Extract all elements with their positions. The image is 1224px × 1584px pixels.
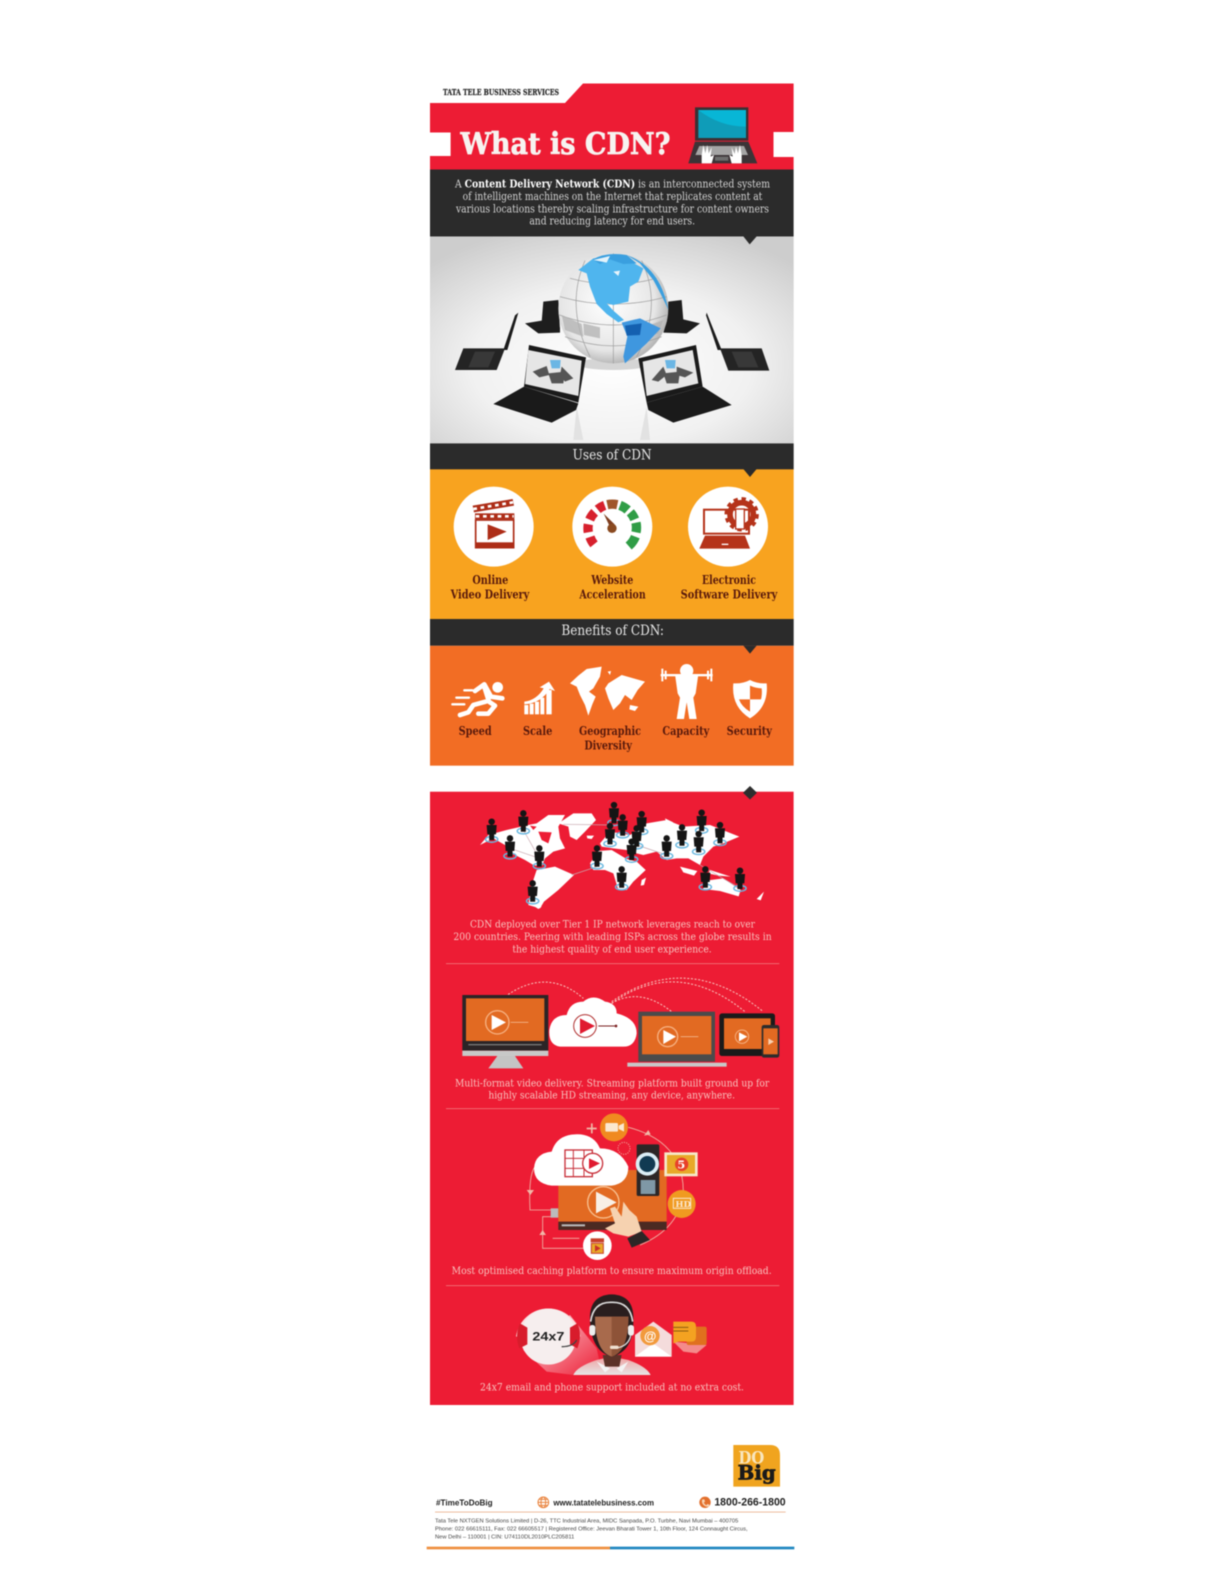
colour bar	[427, 1547, 794, 1549]
phone number: 1800-266-1800	[714, 1497, 786, 1509]
logo: do big: Big	[738, 1461, 776, 1484]
label: geographic diversity	[579, 724, 641, 753]
panel: benefits of CDN	[430, 646, 794, 766]
panel: uses of CDN	[430, 469, 794, 620]
label: online video delivery: Video Delivery	[450, 587, 530, 601]
section: global reach text: 200 countries. Peering with leading ISPs across the globe results in	[453, 930, 772, 943]
logo: do big	[733, 1445, 780, 1487]
hashtag: #TimeToDoBig	[436, 1497, 493, 1507]
definition text	[454, 177, 770, 227]
world map with people	[480, 802, 764, 909]
label: website acceleration	[579, 573, 646, 601]
camera	[636, 1144, 659, 1196]
icon: chat bubbles	[673, 1322, 707, 1353]
diamond marker	[743, 786, 757, 800]
label: security: Security	[727, 724, 773, 738]
benefit icons	[452, 664, 767, 719]
company address: New Delhi – 110001 | CIN: U74110DL2010PLC205811	[435, 1534, 574, 1540]
dotted connection arcs	[505, 978, 763, 1012]
label: online video delivery: Online	[472, 573, 508, 587]
label: electronic software delivery	[681, 573, 778, 601]
label: speed: Speed	[459, 724, 492, 738]
caching text: Most optimised caching platform to ensure maximum origin offload.	[452, 1264, 772, 1277]
video delivery text: highly scalable HD streaming, any device, anywhere.	[488, 1088, 735, 1101]
laptop: back left	[525, 300, 560, 333]
icon: growth bars	[524, 682, 555, 714]
icon: HD badge: HD	[675, 1200, 692, 1210]
illustration: support agent	[573, 1294, 651, 1375]
heading: benefits of CDN: Benefits of CDN:	[561, 623, 664, 639]
icon: runner	[452, 682, 503, 715]
cloud with film strip	[534, 1134, 628, 1186]
globe	[558, 253, 668, 363]
icon: shield	[733, 680, 767, 718]
cloud	[549, 997, 637, 1047]
header panel	[430, 84, 794, 170]
laptop: front right	[638, 345, 732, 423]
icon: pointing hand	[605, 1202, 650, 1248]
icon: envelope	[635, 1322, 672, 1357]
definition text: of intelligent machines on the Internet that replicates content at	[463, 189, 763, 203]
laptop	[627, 1012, 727, 1067]
icon: laptop with typing hands	[688, 107, 757, 163]
icon: weightlifter	[661, 664, 713, 719]
icon: HD badge	[668, 1190, 696, 1218]
icon: world map	[570, 667, 645, 716]
label: electronic software delivery: Electronic	[702, 573, 756, 587]
icon: clapperboard	[454, 487, 534, 567]
section: caching platform	[446, 1108, 779, 1286]
label: capacity: Capacity	[662, 724, 710, 738]
panel: red features background	[430, 792, 794, 1405]
section: global reach	[480, 802, 764, 909]
icon: speedometer	[572, 487, 652, 567]
title: What is CDN?	[460, 127, 670, 162]
icon: clapper badge	[583, 1231, 612, 1260]
video delivery text	[455, 1077, 770, 1101]
circuit lines	[530, 1127, 683, 1248]
logo: do big: DO	[738, 1447, 764, 1467]
heading: uses of CDN: Uses of CDN	[573, 447, 652, 463]
panel: globe and laptops illustration	[430, 236, 794, 443]
support text: 24x7 email and phone support included at no extra cost.	[480, 1381, 744, 1394]
heading: uses of CDN	[430, 443, 794, 469]
laptop: front left	[493, 345, 586, 423]
video delivery text: Multi-format video delivery. Streaming platform built ground up for	[455, 1077, 770, 1090]
label: website acceleration: Acceleration	[579, 587, 646, 601]
badge: five: 5	[677, 1157, 685, 1171]
company address	[435, 1519, 748, 1540]
icon: envelope: @	[644, 1329, 656, 1343]
section: support	[480, 1294, 744, 1394]
label: electronic software delivery: Software Delivery	[681, 587, 778, 601]
badge: five	[664, 1152, 698, 1176]
label: geographic diversity: Diversity	[584, 739, 633, 753]
left white band	[430, 132, 451, 156]
illustration: 24x7 clock with headset	[517, 1309, 602, 1375]
icon: laptop with gear	[688, 487, 768, 567]
label: scale: Scale	[523, 724, 552, 738]
heading: benefits of CDN	[430, 619, 794, 646]
footer	[427, 1445, 794, 1549]
brand tagline: TATA TELE BUSINESS SERVICES	[443, 87, 559, 97]
floor reflections	[573, 407, 650, 440]
section: global reach text: the highest quality of end user experience.	[512, 942, 712, 955]
section: global reach text	[446, 917, 779, 964]
company address: Tata Tele NXTGEN Solutions Limited | D-26, TTC Industrial Area, MIDC Sanpada, P.O. Turbhe, Navi Mumbai – 400705	[435, 1519, 738, 1525]
icon: video camera badge	[600, 1113, 628, 1141]
definition text: A Content Delivery Network (CDN) is an interconnected system	[454, 177, 770, 191]
label: geographic diversity: Geographic	[579, 724, 641, 738]
laptop: far left	[455, 313, 518, 370]
icon: phone	[699, 1497, 711, 1508]
definition text: and reducing latency for end users.	[529, 213, 695, 227]
laptop: far right	[706, 313, 769, 371]
video player screen	[558, 1170, 667, 1230]
company address: Phone: 022 66615111, Fax: 022 66605517 | Registered Office: Jeevan Bharati Tower 1, 10th Floor, 124 Connaught Circus,	[435, 1527, 748, 1533]
illustration: 24x7 clock with headset: 24x7	[532, 1330, 565, 1344]
label: online video delivery	[450, 573, 530, 601]
monitor	[462, 995, 548, 1068]
section: multi-format video delivery	[455, 978, 779, 1101]
panel: definition	[430, 170, 794, 236]
small arrows and marks	[527, 1123, 651, 1235]
laptop: back right	[663, 300, 700, 333]
right white band	[774, 132, 794, 157]
label: website acceleration: Website	[591, 573, 633, 587]
section: global reach text: CDN deployed over Tier 1 IP network leverages reach to over	[470, 917, 756, 930]
tablet and phone	[719, 1013, 779, 1058]
website: www.tatatelebusiness.com	[552, 1497, 654, 1507]
definition text: various locations thereby scaling infrastructure for content owners	[455, 201, 769, 215]
icon: web globe	[538, 1497, 549, 1508]
